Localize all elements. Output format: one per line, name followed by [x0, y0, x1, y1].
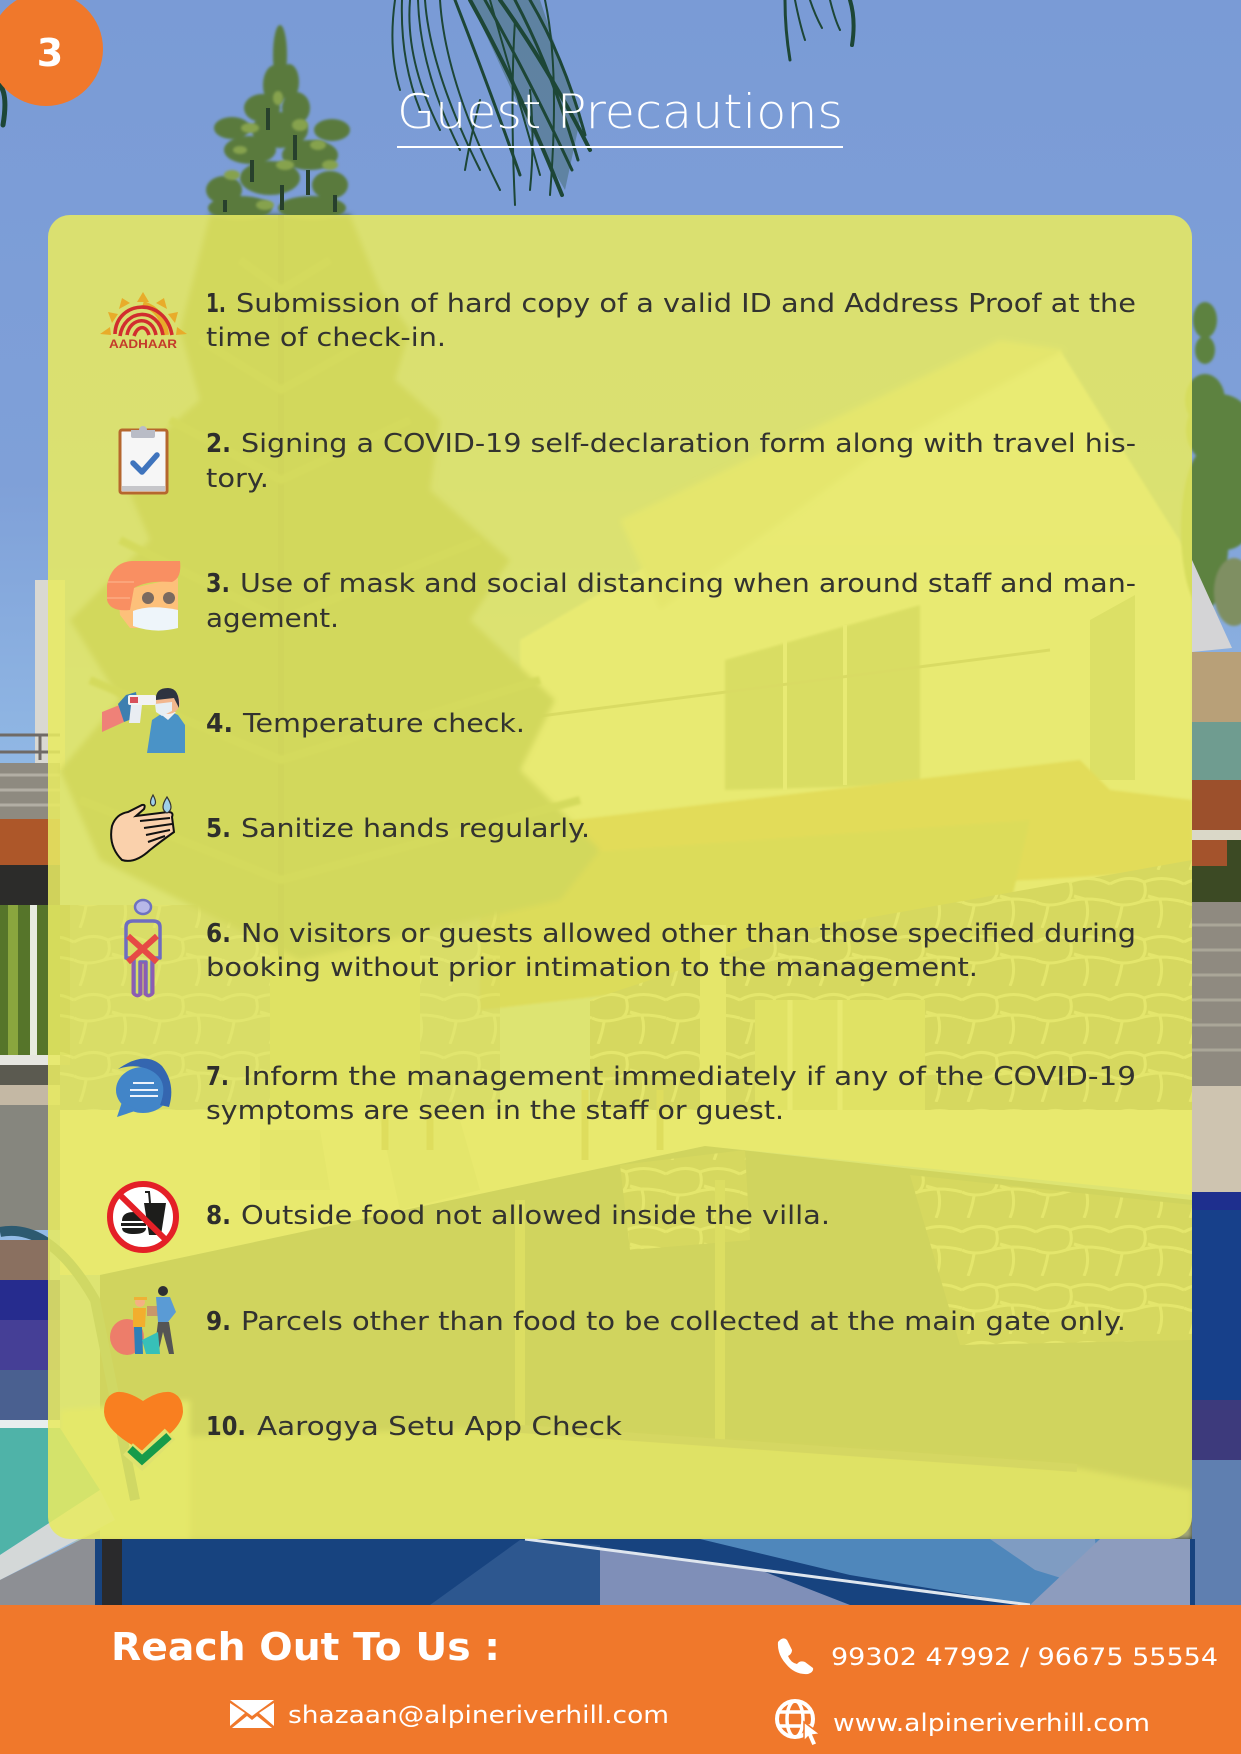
- icon: envelope: [230, 1700, 274, 1728]
- item 8 text: Outside food not allowed inside the villa.: [241, 1201, 830, 1231]
- item 1 text: 1.: [206, 289, 226, 319]
- item 3 text: [206, 569, 1136, 634]
- footer heading: Reach Out To Us :: [111, 1625, 500, 1669]
- icon: parcel handover: [110, 1286, 176, 1355]
- icon: no outside food sign: [110, 1184, 176, 1250]
- icon: aadhaar logo: [100, 292, 187, 351]
- pool reflection: [100, 1146, 1192, 1539]
- item 9 text: 9.: [206, 1307, 231, 1337]
- icon: clipboard with check: [120, 426, 167, 493]
- building windows: [725, 605, 920, 790]
- icon: Aarogya Setu heart: [104, 1392, 183, 1461]
- main villa facade: [520, 350, 1192, 900]
- item 7: [116, 1059, 1136, 1126]
- balcony wood fascia: [480, 760, 1192, 900]
- item 4 text: Temperature check.: [242, 709, 525, 739]
- bottom strip: [95, 1539, 1195, 1605]
- item 4: [102, 688, 525, 753]
- background palm fronds: [0, 0, 854, 205]
- icon: face with mask: [107, 561, 180, 631]
- item 6 text: [206, 919, 1136, 983]
- item 6 text: 6.: [206, 919, 231, 949]
- icon: temperature check: [102, 688, 185, 753]
- item 1 text: time of check-in.: [206, 323, 446, 353]
- phone numbers: 99302 47992 / 96675 55554: [831, 1643, 1218, 1671]
- website address: www.alpineriverhill.com: [833, 1709, 1150, 1737]
- item 6 text: booking without prior intimation to the management.: [206, 953, 978, 983]
- left pool side: [0, 1231, 135, 1500]
- item 10 text: 10.: [206, 1412, 246, 1442]
- item 1 text: [206, 289, 1136, 353]
- panel: contact footer: [0, 1605, 1241, 1754]
- item 9 text: Parcels other than food to be collected at the main gate only.: [241, 1307, 1126, 1337]
- item 7 text: Inform the management immediately if any of the COVID-19: [243, 1062, 1136, 1092]
- item 5: [111, 795, 590, 861]
- item 2 text: tory.: [206, 464, 269, 494]
- item 8 text: 8.: [206, 1201, 231, 1231]
- item 4 text: 4.: [206, 709, 233, 739]
- number badge: [0, 0, 103, 106]
- item 3 text: 3.: [206, 569, 230, 599]
- item 1: [100, 289, 1136, 353]
- icon: phone: [778, 1638, 813, 1674]
- icon: globe with cursor: [777, 1701, 820, 1746]
- right side foliage, building and pool: [1181, 302, 1241, 626]
- item 3 text: Use of mask and social distancing when around staff and man-: [240, 569, 1136, 599]
- email address: shazaan@alpineriverhill.com: [288, 1701, 669, 1729]
- title: Guest Precautions: [397, 85, 843, 140]
- item 10: [104, 1392, 622, 1461]
- item 2 text: Signing a COVID-19 self-declaration form along with travel his-: [241, 429, 1136, 459]
- item 10 text: Aarogya Setu App Check: [257, 1412, 622, 1442]
- badge number: 3: [37, 31, 63, 75]
- item 3: [107, 561, 1136, 634]
- item 8: [110, 1184, 830, 1250]
- item 9: [110, 1286, 1126, 1355]
- icon: washing hands: [111, 795, 174, 861]
- deck: [60, 1110, 1241, 1275]
- item 7 text: symptoms are seen in the staff or guest.: [206, 1096, 784, 1126]
- item 2 text: 2.: [206, 429, 231, 459]
- background tree: [60, 25, 600, 960]
- item 3 text: agement.: [206, 604, 339, 634]
- icon: chat bubbles: [116, 1059, 171, 1117]
- panel: precautions list: [48, 215, 1192, 1539]
- icon: crossed-out person: [126, 900, 160, 996]
- item 6: [126, 900, 1136, 996]
- item 2 text: [206, 429, 1136, 494]
- item 2: [120, 426, 1136, 494]
- item 7 text: [206, 1062, 1136, 1126]
- icon: aadhaar logo: AADHAAR: [109, 337, 177, 351]
- item 5 text: Sanitize hands regularly.: [241, 814, 590, 844]
- item 1 text: Submission of hard copy of a valid ID and Address Proof at the: [236, 289, 1136, 319]
- item 6 text: No visitors or guests allowed other than those specified during: [241, 919, 1136, 949]
- item 5 text: 5.: [206, 814, 231, 844]
- deck furniture: [260, 1120, 480, 1210]
- stone walls: [590, 860, 1192, 1110]
- left side tower: [35, 580, 65, 770]
- item 7 text: 7.: [206, 1062, 229, 1092]
